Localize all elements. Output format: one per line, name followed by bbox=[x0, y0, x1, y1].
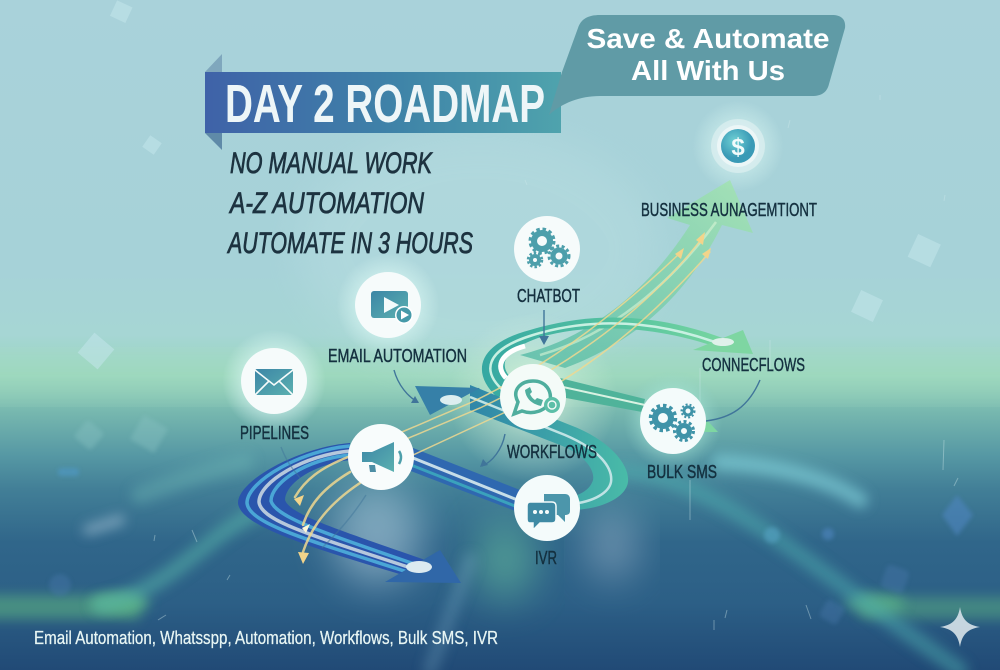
icon: whatsapp bbox=[500, 364, 566, 430]
labels: BULK SMS bbox=[647, 462, 717, 482]
road: upper teal-green loop bbox=[482, 317, 753, 398]
labels: CHATBOT bbox=[517, 286, 580, 306]
callout: All With Us bbox=[631, 55, 785, 86]
labels: EMAIL AUTOMATION bbox=[328, 346, 467, 366]
labels: IVR bbox=[535, 548, 557, 568]
icon: gears bbox=[640, 388, 706, 454]
icon: dollar: $ bbox=[731, 134, 745, 161]
labels: PIPELINES bbox=[240, 423, 309, 443]
text block: benefits: NO MANUAL WORK bbox=[230, 147, 433, 180]
sparkle: bottom right bbox=[940, 607, 980, 647]
icon: video bbox=[355, 272, 421, 338]
heading: DAY 2 ROADMAP bbox=[225, 74, 545, 134]
leader arrows bbox=[281, 310, 760, 548]
callout bbox=[549, 15, 845, 115]
icon: chat bubbles bbox=[514, 475, 580, 541]
icon: chatbot gears bbox=[514, 216, 580, 282]
road: teal S loop bbox=[415, 385, 628, 510]
road: blue lower section bbox=[238, 443, 520, 583]
labels bbox=[240, 200, 817, 568]
text block: benefits bbox=[227, 147, 473, 260]
road: big green up arrow bbox=[520, 180, 753, 368]
road: green section to gears bbox=[560, 378, 718, 432]
icon: dollar bbox=[711, 119, 765, 173]
glows bbox=[222, 100, 784, 482]
labels: BUSINESS AUNAGEMTIONT bbox=[641, 200, 817, 220]
labels: WORKFLOWS bbox=[507, 442, 597, 462]
icon: envelope bbox=[241, 348, 307, 414]
gold arrowheads bbox=[294, 232, 711, 564]
footer caption: Email Automation, Whatsspp, Automation, Workflows, Bulk SMS, IVR bbox=[34, 628, 498, 648]
leader arrowheads bbox=[411, 336, 549, 467]
gold arrows bbox=[295, 237, 710, 552]
text block: benefits: AUTOMATE IN 3 HOURS bbox=[227, 227, 473, 260]
callout: Save & Automate bbox=[586, 23, 830, 54]
text block: benefits: A-Z AUTOMATION bbox=[228, 187, 424, 220]
labels: CONNECFLOWS bbox=[702, 355, 805, 375]
banner: day 2 roadmap bbox=[205, 54, 561, 150]
icon: megaphone bbox=[348, 424, 414, 490]
